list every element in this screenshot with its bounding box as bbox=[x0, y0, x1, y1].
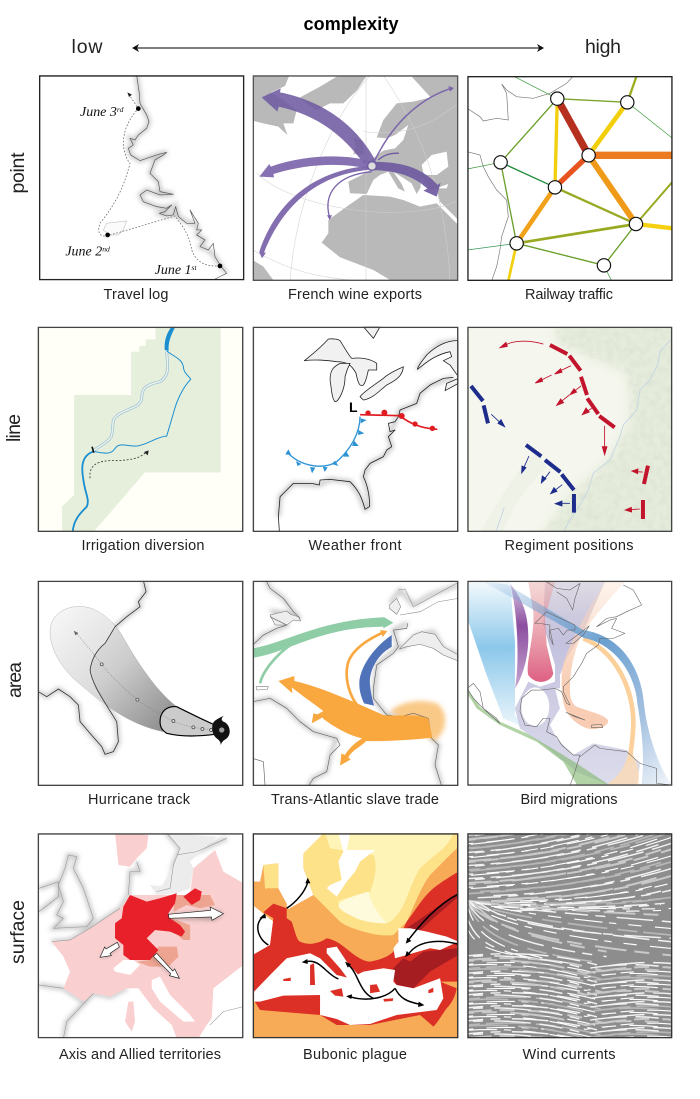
flow arrow: West Africa bbox=[328, 172, 372, 217]
arrowhead: West Africa bbox=[327, 215, 332, 220]
island bbox=[103, 221, 127, 235]
big orange flow bbox=[278, 676, 432, 766]
caption: French wine exports: French wine exports bbox=[288, 287, 422, 303]
thin orange flow bbox=[347, 632, 383, 708]
Corsica bbox=[125, 1002, 135, 1032]
flow arrow: North America bbox=[262, 88, 376, 164]
purple flyway bbox=[510, 583, 528, 688]
row label: area: area bbox=[4, 662, 26, 698]
blue movement arrows bbox=[491, 414, 570, 506]
arrowhead: Russia bbox=[448, 86, 454, 92]
station nodes bbox=[494, 92, 643, 272]
caption: Trans-Atlantic slave trade: Trans-Atlantic slave trade bbox=[271, 792, 439, 808]
panel: bubonic plague map bbox=[252, 833, 458, 1038]
arrow shadows bbox=[100, 911, 223, 978]
gulf gap bbox=[521, 687, 549, 726]
label: June 1st: June 1 bbox=[155, 263, 192, 278]
caption: Travel log: Travel log bbox=[104, 287, 168, 303]
coast shadow bbox=[278, 341, 458, 517]
Norway bbox=[115, 833, 148, 867]
flow arrow: Russia bbox=[373, 89, 450, 165]
spread band: lightest bbox=[338, 892, 387, 923]
land fills: Europe and islands bbox=[256, 598, 458, 690]
panel: hurricane track map bbox=[38, 580, 244, 786]
Switzerland bbox=[113, 960, 140, 975]
coast shadows bbox=[253, 581, 458, 786]
low pressure label: L bbox=[349, 399, 358, 415]
upper streamlines bbox=[460, 785, 677, 909]
arrowheads bbox=[259, 878, 424, 1007]
slave origin glow bbox=[390, 701, 445, 741]
row label: line: line bbox=[3, 414, 25, 442]
river: upstream thick bbox=[165, 327, 175, 351]
coastlines bbox=[39, 833, 243, 1038]
land-side lightening bbox=[50, 606, 115, 708]
blue flow bbox=[359, 635, 392, 706]
blue regiment bars bbox=[471, 386, 574, 513]
track arrowhead bbox=[74, 631, 78, 635]
Baltic and sea shading bbox=[150, 833, 217, 895]
middle fan streamlines bbox=[467, 901, 677, 963]
caption: Railway traffic: Railway traffic bbox=[525, 287, 613, 303]
arrow: complexity axis bbox=[132, 44, 544, 52]
label: June 2nd: nd bbox=[102, 245, 110, 254]
arrowhead bbox=[144, 450, 149, 455]
Black Sea bbox=[422, 152, 448, 175]
label: June 2nd: June 2 bbox=[65, 245, 102, 260]
cold front bbox=[285, 417, 367, 473]
rail links bbox=[467, 76, 673, 281]
caption: Weather front: Weather front bbox=[308, 538, 402, 554]
arrow tip bbox=[127, 92, 132, 97]
river bbox=[496, 340, 671, 532]
Poland region bbox=[183, 888, 202, 905]
plague spread arrows bbox=[258, 882, 458, 1004]
western flyway bbox=[467, 582, 525, 728]
red flyway bbox=[528, 582, 555, 682]
green flow: Caribbean bbox=[260, 640, 300, 683]
panel: weather front map bbox=[252, 326, 458, 532]
panel: regiment positions map bbox=[467, 326, 672, 532]
axis label: high: high bbox=[585, 36, 621, 58]
spread band: red bbox=[253, 872, 458, 1027]
panel: bird migrations map bbox=[467, 580, 672, 786]
coastline bbox=[467, 76, 573, 281]
Allied-occupied territory bbox=[52, 850, 243, 1038]
coastline bbox=[38, 581, 146, 754]
caption: Hurricane track: Hurricane track bbox=[88, 792, 191, 808]
origin node bbox=[368, 162, 376, 170]
panel: railway traffic map bbox=[467, 76, 673, 281]
Atlantic bbox=[253, 833, 325, 955]
coastlines bbox=[253, 581, 442, 786]
caption: Bird migrations: Bird migrations bbox=[520, 792, 618, 808]
thin orange arrowhead bbox=[380, 630, 387, 637]
Axis-allied salmon territory bbox=[137, 895, 215, 967]
green flyway bbox=[467, 688, 608, 784]
graticule bbox=[253, 75, 458, 281]
Mediterranean Sea bbox=[254, 953, 443, 1025]
lower streamlines: second pass bbox=[442, 956, 659, 1051]
Adriatic sea bbox=[152, 977, 195, 1022]
coast shadow bbox=[38, 581, 146, 754]
panel: French wine exports map bbox=[252, 75, 458, 281]
panel: travel log map bbox=[39, 75, 244, 280]
row label: surface: surface bbox=[7, 900, 29, 964]
terrain bbox=[480, 320, 680, 540]
Black Sea bbox=[393, 928, 458, 958]
great lakes bbox=[304, 327, 458, 402]
hurricane symbol bbox=[212, 716, 230, 745]
route: dotted travel path bbox=[99, 93, 220, 266]
central lavender flyway bbox=[515, 582, 640, 784]
spread band: pale yellow bbox=[325, 833, 453, 923]
plague islands bbox=[283, 963, 433, 1002]
caption: Bubonic plague: Bubonic plague bbox=[303, 1047, 407, 1063]
caption: Wind currents: Wind currents bbox=[522, 1047, 616, 1063]
panel: irrigation diversion map bbox=[38, 326, 244, 532]
panel: trans-Atlantic slave trade map bbox=[252, 580, 458, 786]
track points bbox=[100, 663, 213, 732]
location markers bbox=[105, 106, 222, 268]
green flow: to Europe bbox=[253, 617, 393, 658]
Southern England bbox=[263, 888, 287, 905]
lower streamlines bbox=[460, 954, 677, 1049]
northern Europe outline bbox=[398, 582, 458, 615]
arrow: east bbox=[168, 907, 223, 920]
label: June 1st: st bbox=[192, 263, 198, 272]
Germany bbox=[115, 893, 185, 960]
coastline shadow bbox=[128, 75, 227, 273]
upper streamlines: second pass bbox=[444, 787, 661, 911]
title: complexity: complexity bbox=[304, 14, 398, 34]
red movement arrows bbox=[500, 341, 643, 512]
track line bbox=[76, 632, 222, 730]
caption: Axis and Allied territories: Axis and Allied territories bbox=[59, 1047, 221, 1063]
arrow: south bbox=[153, 953, 179, 978]
caption: Irrigation diversion: Irrigation diversion bbox=[82, 538, 204, 554]
Italy bbox=[327, 947, 358, 982]
orange lower blob bbox=[607, 755, 639, 784]
flow arrow: Middle East bbox=[372, 162, 441, 197]
panel: wind currents map bbox=[467, 833, 672, 1038]
row label: point: point bbox=[7, 152, 29, 194]
forecast cone bbox=[50, 606, 177, 732]
diversion dam bbox=[92, 447, 94, 453]
panel: Axis and Allied territories map bbox=[38, 833, 244, 1038]
spread band: yellow bbox=[303, 833, 458, 935]
warm front bbox=[360, 410, 437, 431]
peach flyway bbox=[562, 582, 625, 729]
spread band: dark red bbox=[392, 893, 458, 988]
river: downstream thick bbox=[73, 452, 93, 532]
Baltic sea bbox=[327, 833, 375, 897]
flow arrow: South America south bbox=[259, 166, 372, 258]
3-day cone bbox=[160, 707, 215, 736]
blue flyway bbox=[483, 582, 672, 784]
dotted arrow bbox=[90, 453, 145, 478]
orange flyway bbox=[583, 638, 633, 762]
red regiment bars bbox=[550, 345, 648, 519]
caption: Regiment positions: Regiment positions bbox=[504, 538, 634, 554]
coast shadows bbox=[39, 833, 227, 1038]
flow arrow: central Europe bbox=[378, 153, 399, 160]
flow arrow: South America north bbox=[259, 156, 372, 177]
coastlines bbox=[467, 581, 672, 786]
axis label: low: low bbox=[72, 36, 103, 58]
river: natural channel bbox=[93, 351, 191, 453]
label: June 3rd: June 3 bbox=[80, 105, 117, 120]
canal bbox=[93, 352, 168, 451]
arrow: west bbox=[100, 942, 119, 957]
Ireland bbox=[255, 882, 264, 900]
irrigated area bbox=[62, 327, 221, 532]
land masses bbox=[253, 75, 458, 281]
label: June 3rd: rd bbox=[117, 105, 124, 114]
UK bbox=[263, 863, 278, 892]
coastline bbox=[128, 75, 227, 280]
coastline bbox=[278, 377, 453, 532]
